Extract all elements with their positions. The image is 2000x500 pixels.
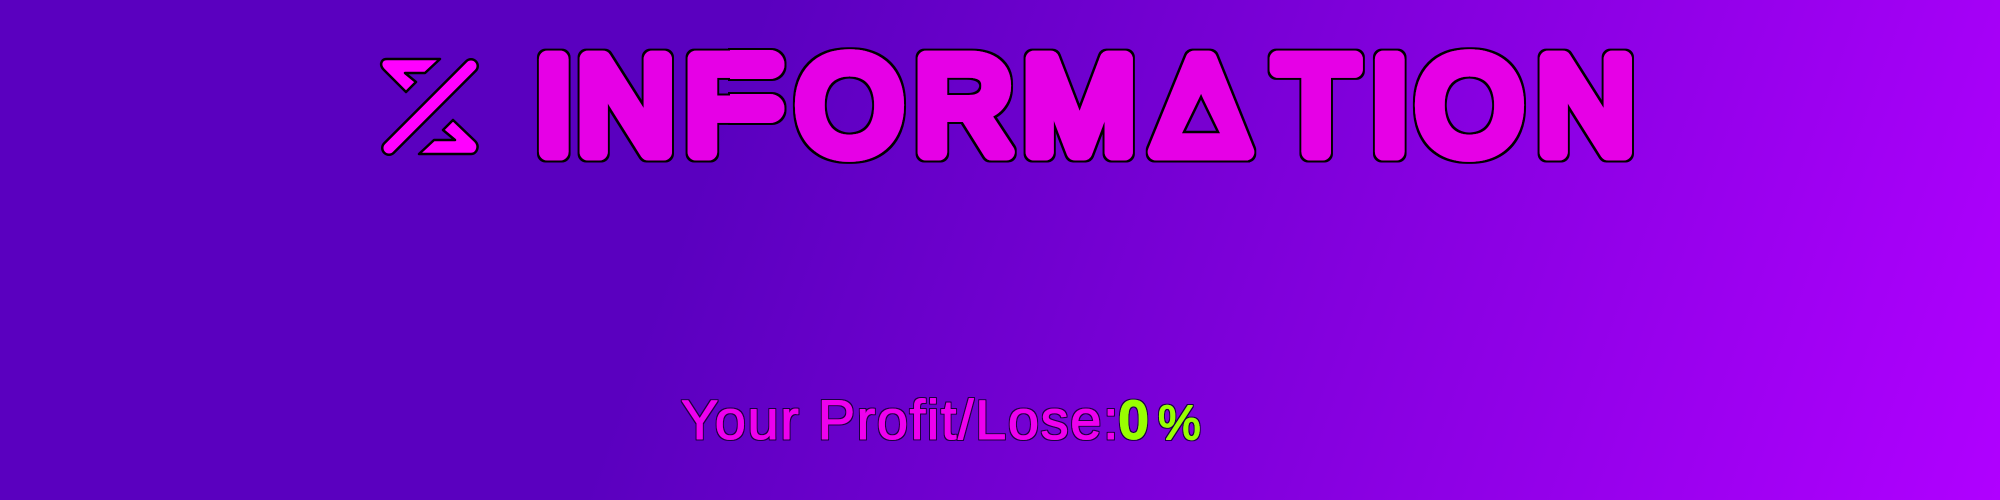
profit and loss readout: % xyxy=(1158,397,1202,450)
letter F extended arms xyxy=(730,50,784,123)
letter A triangular counter xyxy=(1184,97,1218,132)
letter A solid base xyxy=(1156,118,1248,160)
profit and loss readout: Your Profit/Lose: xyxy=(681,388,1120,451)
title: INFORMATION xyxy=(535,30,1634,181)
icon: exchange arrows xyxy=(381,59,478,154)
profit and loss readout: 0 xyxy=(1118,388,1168,451)
